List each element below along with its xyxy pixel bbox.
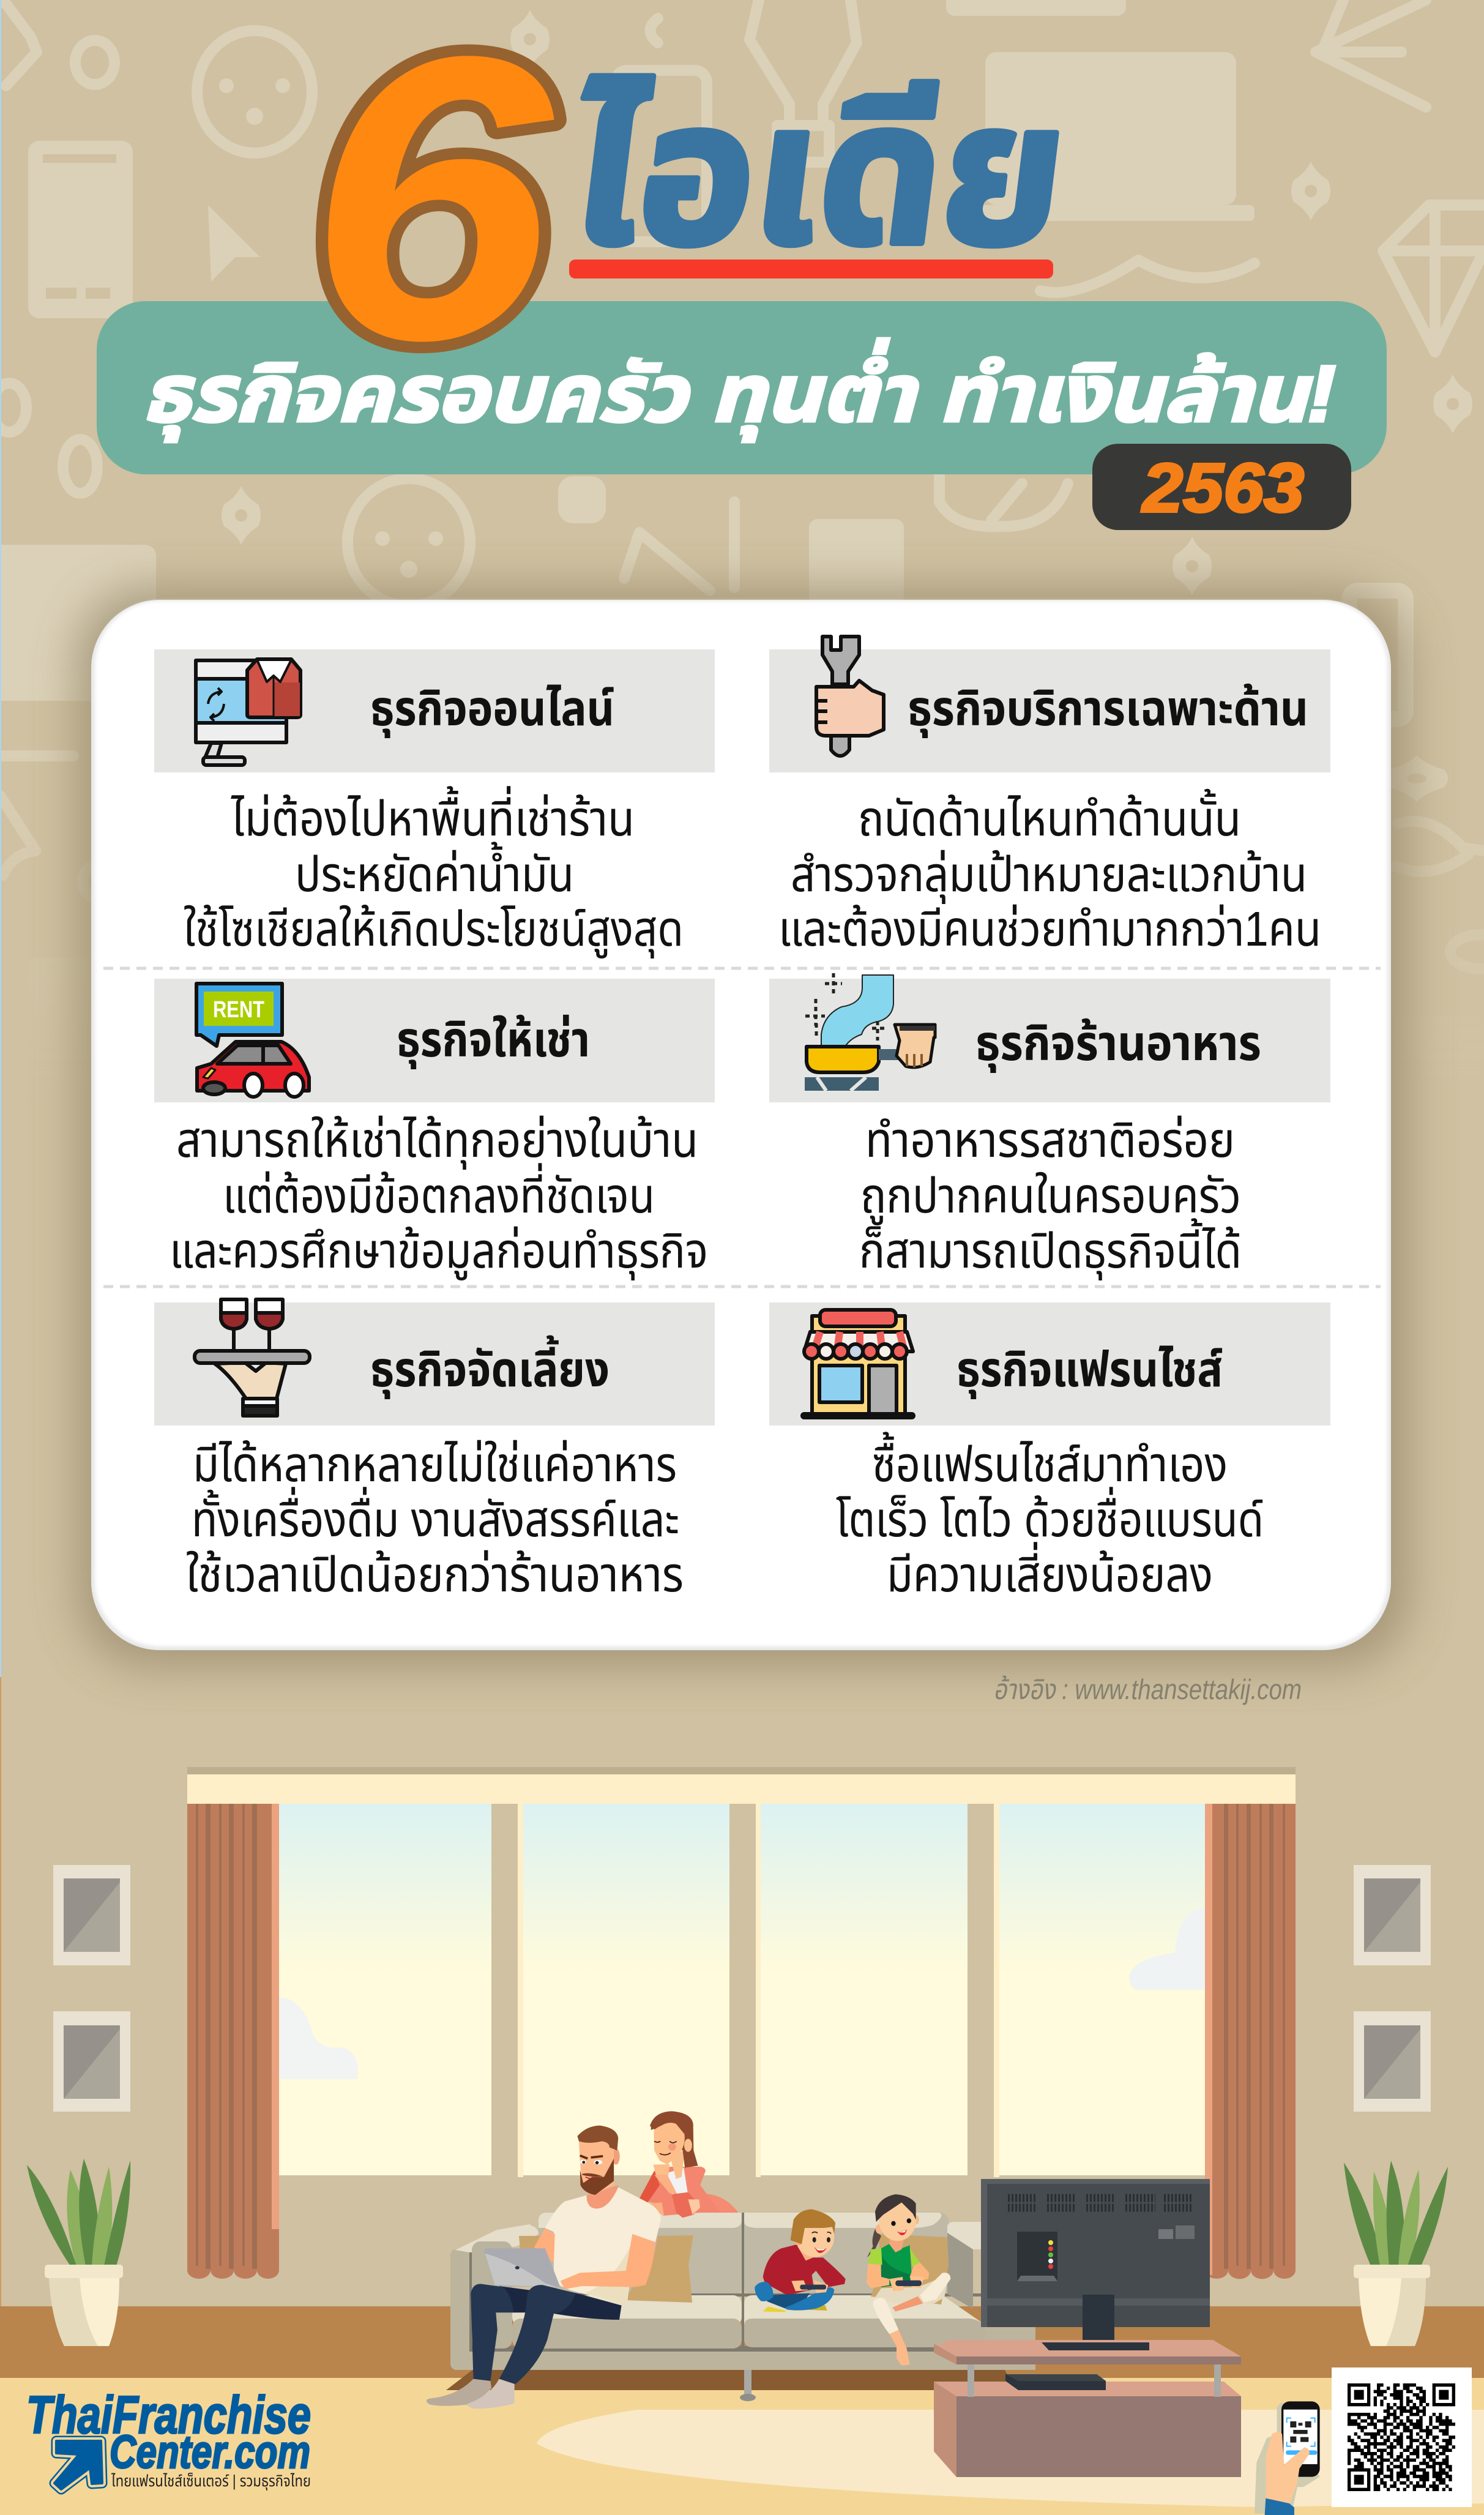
body: online <box>184 786 684 959</box>
body: restaurant: ถูกปากคนในครอบครัว <box>860 1168 1241 1225</box>
body: rental <box>170 1113 708 1280</box>
left curtain <box>187 1804 279 2279</box>
body: specialist service: สำรวจกลุ่มเป้าหมายละแวกบ้าน <box>791 847 1307 904</box>
red underline <box>569 260 1053 278</box>
icon: rent car <box>196 984 309 1097</box>
thin left edge strip <box>0 0 1 2515</box>
body: restaurant: ทำอาหารรสชาติอร่อย <box>865 1113 1235 1167</box>
body: rental: และควรศึกษาข้อมูลก่อนทำธุรกิจ <box>170 1224 708 1280</box>
heading: rental: ธุรกิจให้เช่า <box>397 1012 590 1069</box>
TV table <box>934 2340 1241 2477</box>
icon: logo arrow <box>54 2441 102 2489</box>
year badge <box>1092 444 1351 530</box>
body: franchise: มีความเสี่ยงน้อยลง <box>887 1542 1213 1602</box>
source credit: อ้างอิง : www.thansettakij.com <box>993 1673 1302 1705</box>
right plant <box>1344 2161 1448 2346</box>
body: rental: สามารถให้เช่าได้ทุกอย่างในบ้าน <box>176 1113 698 1170</box>
body: specialist service: และต้องมีคนช่วยทำมากกว่า1คน <box>778 902 1321 956</box>
body: franchise: ซื้อแฟรนไชส์มาทำเอง <box>872 1432 1228 1492</box>
heading: specialist service: ธุรกิจบริการเฉพาะด้าน <box>908 681 1308 738</box>
row dividers <box>103 968 1381 1287</box>
body: specialist service: ถนัดด้านไหนทำด้านนั้น <box>858 789 1241 846</box>
icon: wrench and fist <box>816 637 884 756</box>
heading: online: ธุรกิจออนไลน์ <box>370 681 614 738</box>
subtitle: ธุรกิจครอบครัว ทุนต่ำ ทำเงินล้าน! <box>142 338 1336 442</box>
QR code <box>1332 2367 1472 2507</box>
logo: ThaiFranchise <box>26 2386 311 2445</box>
heading: franchise: ธุรกิจแฟรนไชส์ <box>956 1342 1223 1399</box>
girl with controller <box>867 2194 950 2366</box>
body: catering <box>186 1437 684 1602</box>
year badge: 2563 <box>1141 449 1304 526</box>
phone in hand <box>1255 2401 1320 2515</box>
body: restaurant <box>859 1113 1242 1280</box>
TV <box>981 2179 1210 2350</box>
woman <box>639 2111 739 2218</box>
background icon pattern <box>1 0 1484 965</box>
scene: floor <box>0 2306 1484 2515</box>
heading: catering: ธุรกิจจัดเลี้ยง <box>370 1336 610 1399</box>
icon: online monitor and shirt <box>196 659 300 765</box>
body: online: ใช้โซเชียลให้เกิดประโยชน์สูงสุด <box>184 902 684 959</box>
body: catering: ทั้งเครื่องดื่ม งานสังสรรค์และ <box>192 1487 679 1547</box>
logo: Center.com <box>110 2426 310 2478</box>
body: franchise: โตเร็ว โตไว ด้วยชื่อแบรนด์ <box>836 1487 1264 1547</box>
body: catering: ใช้เวลาเปิดน้อยกว่าร้านอาหาร <box>186 1547 684 1602</box>
body: restaurant: ก็สามารถเปิดธุรกิจนี้ได้ <box>859 1218 1242 1280</box>
sofa <box>446 2213 1035 2401</box>
body: specialist service <box>778 789 1321 956</box>
heading: restaurant: ธุรกิจร้านอาหาร <box>975 1016 1261 1073</box>
title panel: green banner <box>97 301 1387 474</box>
scene: window <box>187 1767 1296 2177</box>
body: catering: มีได้หลากหลายไม่ใช่แค่อาหาร <box>193 1437 677 1492</box>
body: online: ประหยัดค่าน้ำมัน <box>295 842 574 902</box>
left plant <box>27 2159 130 2346</box>
right curtain <box>1205 1804 1296 2279</box>
body: franchise <box>836 1432 1264 1602</box>
body: online: ไม่ต้องไปหาพื้นที่เช่าร้าน <box>230 786 635 846</box>
boy with controller <box>755 2209 846 2312</box>
icon: rent car: RENT <box>213 997 264 1023</box>
icon: serving tray <box>195 1299 310 1416</box>
icon: frying pan <box>805 973 935 1091</box>
title word: ไอเดีย <box>560 61 1078 286</box>
body: rental: แต่ต้องมีข้อตกลงที่ชัดเจน <box>223 1163 655 1223</box>
left wall frames <box>53 1865 130 2112</box>
man with laptop <box>427 2126 661 2408</box>
main white panel <box>76 588 1411 1668</box>
icon: franchise shop <box>802 1310 914 1418</box>
right wall frames <box>1354 1865 1431 2112</box>
logo <box>26 2386 311 2491</box>
logo: ไทยแฟรนไชส์เซ็นเตอร์ | รวมธุรกิจไทย <box>111 2472 311 2491</box>
header bars <box>154 649 1330 1426</box>
